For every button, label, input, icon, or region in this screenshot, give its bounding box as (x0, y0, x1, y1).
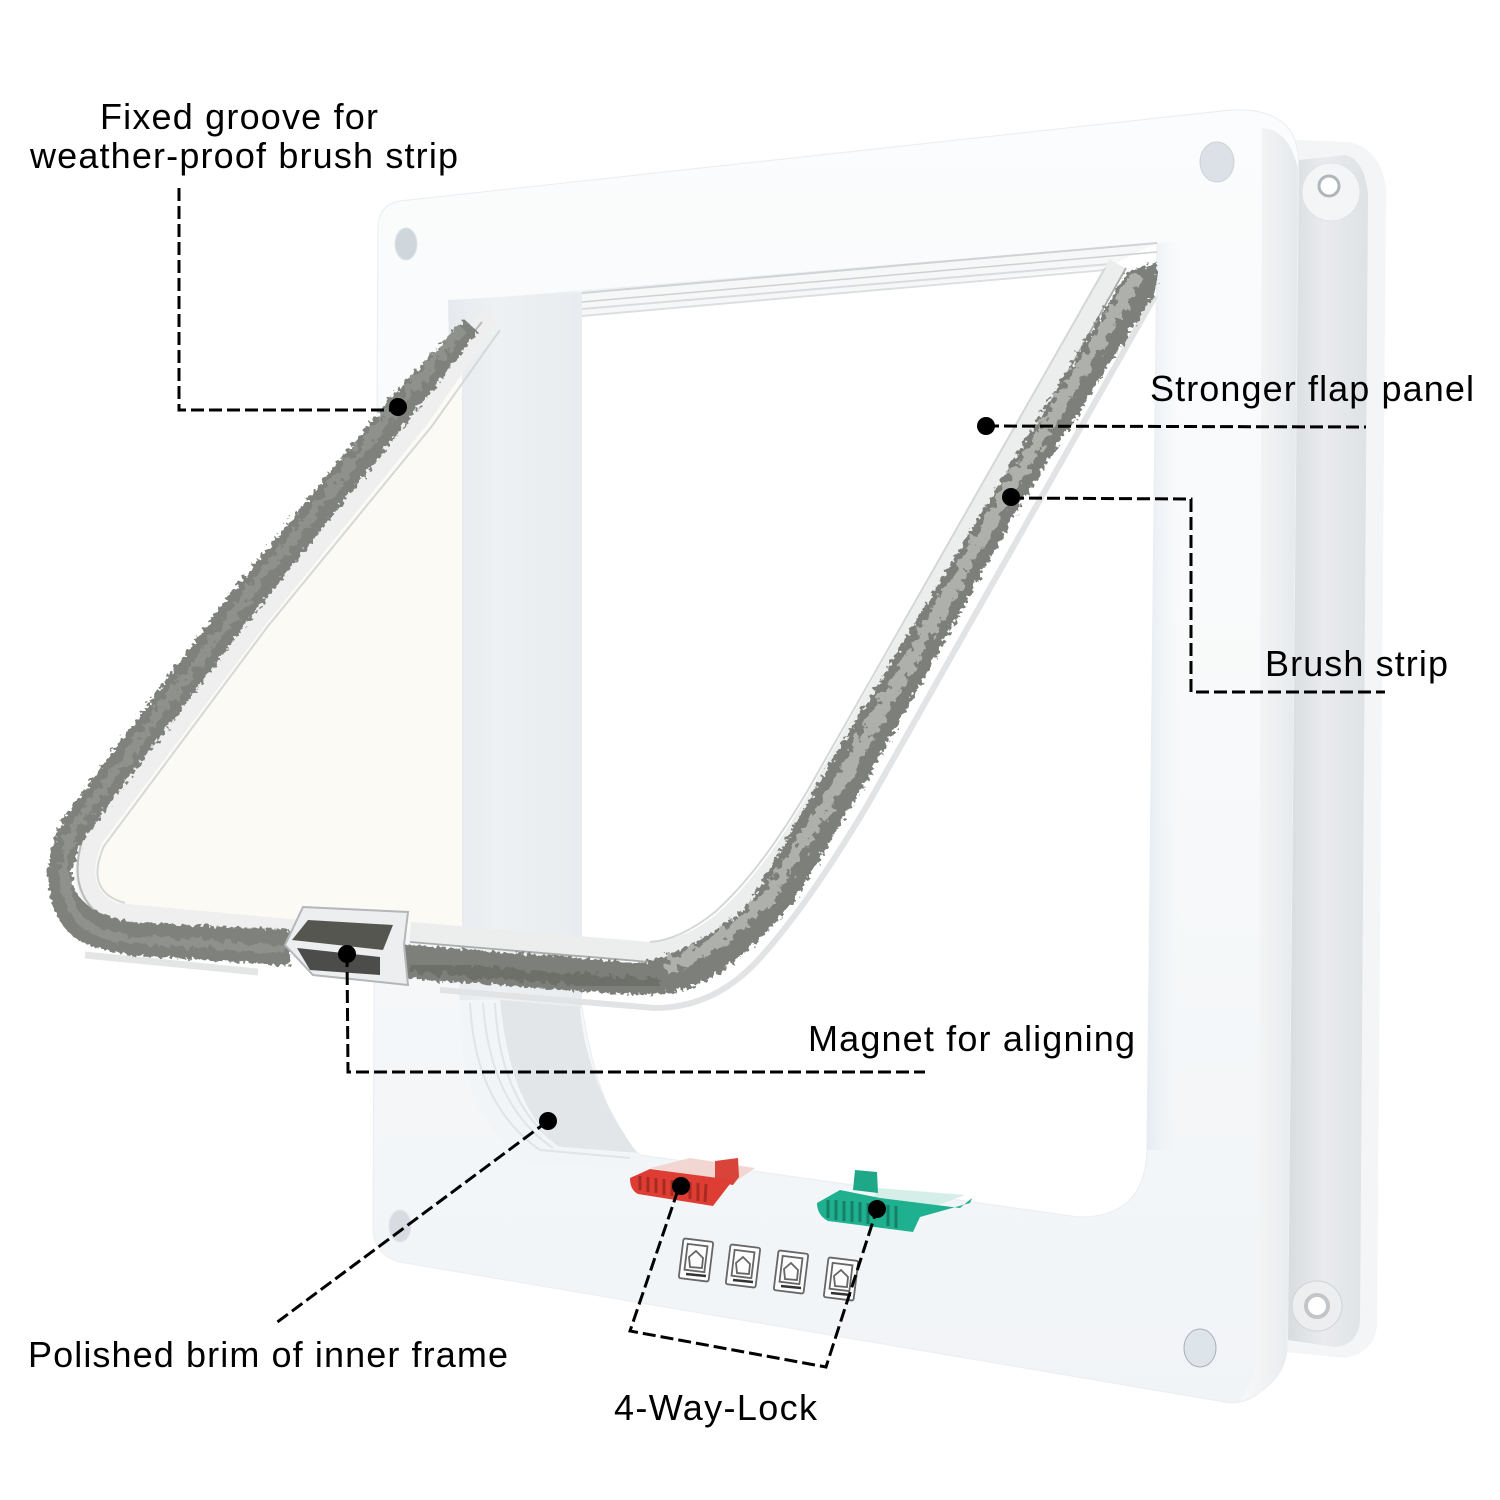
callout: flap panel: Stronger flap panel (1150, 368, 1474, 409)
callout: magnet: Magnet for aligning (808, 1018, 1135, 1059)
callout: 4-way lock (614, 1177, 886, 1428)
polished brim (460, 1000, 645, 1170)
screw hole top right (1200, 142, 1234, 182)
callout: fixed groove: weather-proof brush strip (29, 135, 458, 176)
inner wall of frame (448, 292, 637, 1153)
callout: magnet (338, 945, 1135, 1072)
frame side bevel (1240, 128, 1298, 1400)
screw hole bottom right (1184, 1329, 1216, 1367)
screw hole bottom left (389, 1210, 411, 1242)
red lock slider (630, 1158, 755, 1206)
front frame (373, 110, 1298, 1403)
frame inner shading (1147, 241, 1185, 1150)
callout: brush strip (1002, 488, 1448, 692)
callout: polished brim (28, 1112, 557, 1375)
lock mode icons (679, 1238, 858, 1301)
right brush strip (398, 262, 1157, 995)
callout: brush strip: Brush strip (1265, 643, 1448, 684)
clear flap panel (78, 264, 1155, 1008)
callout: 4-way lock: 4-Way-Lock (614, 1387, 818, 1428)
callout: fixed groove: Fixed groove for (100, 96, 378, 137)
green lock slider (817, 1170, 972, 1232)
back plate top screw mount (1302, 163, 1360, 221)
callout: polished brim: Polished brim of inner frame (28, 1334, 508, 1375)
back plate (1285, 140, 1386, 1358)
top sill of opening (582, 243, 1157, 316)
callout: fixed groove (29, 96, 458, 416)
screw hole top left (395, 228, 417, 260)
left and bottom brush strip (48, 320, 478, 966)
magnet housing (285, 907, 408, 985)
back plate bottom screw mount (1292, 1281, 1342, 1331)
callout: flap panel (977, 368, 1474, 435)
